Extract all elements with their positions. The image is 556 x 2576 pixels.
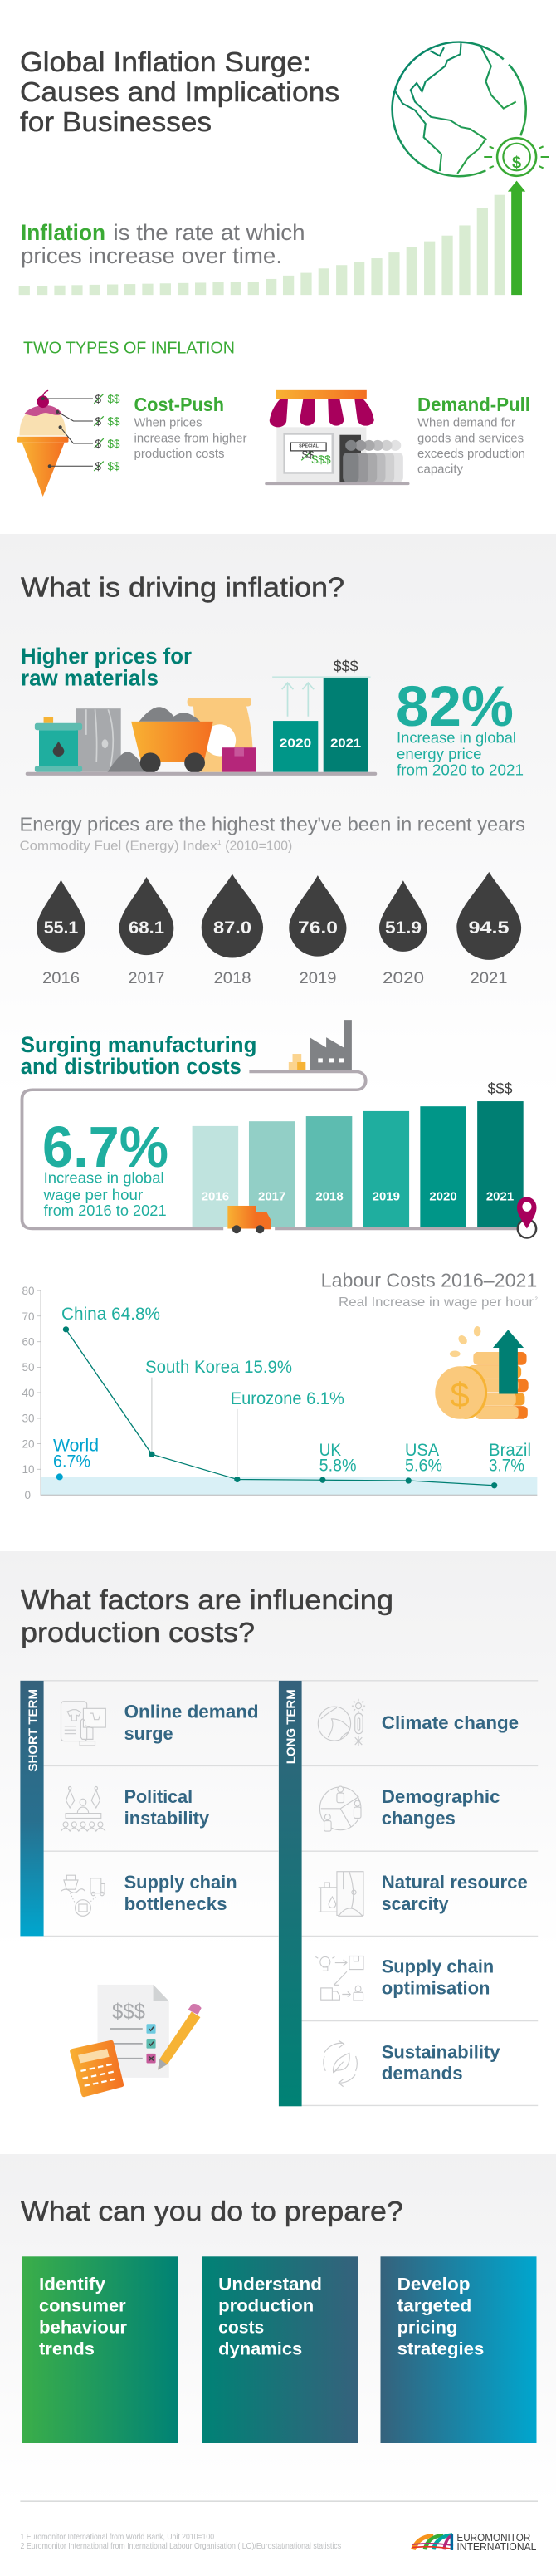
logo: Euromonitor International: EUROMONITOR (456, 2531, 530, 2544)
chart y axis labels: 70 (22, 1310, 35, 1323)
chart data labels (53, 1305, 531, 1475)
section backgrounds (0, 534, 556, 2503)
price labels: $ (95, 460, 101, 473)
chart y axis labels: 20 (22, 1438, 35, 1450)
chart data labels: UK (319, 1441, 341, 1460)
icon: supply chain bottlenecks (61, 1875, 105, 1916)
subheading: surging costs: Surging manufacturing (21, 1032, 256, 1057)
wage bar labels (202, 1080, 514, 1204)
card: production dynamics: costs (218, 2319, 264, 2338)
logo: Euromonitor International (412, 2531, 536, 2553)
drop years: 2016 (42, 970, 80, 987)
icons: factor line art (61, 1699, 365, 2087)
cost-push text: When prices (134, 415, 202, 430)
factor labels: long term: Sustainability (382, 2041, 500, 2063)
card: pricing strategies: pricing (397, 2319, 457, 2338)
card: production dynamics: production (218, 2297, 314, 2316)
subheading: higher prices (21, 644, 192, 691)
shop sign text (299, 443, 331, 466)
drop values (44, 918, 510, 938)
bar labels 2020 and 2021: $$$ (334, 658, 358, 674)
chart data labels: World (53, 1437, 99, 1455)
icon: online demand (61, 1702, 105, 1746)
card: identify trends (22, 2256, 178, 2443)
stat: 6.7 percent: from 2016 to 2021 (44, 1202, 167, 1219)
factor labels: long term: Demographic (382, 1786, 500, 1807)
illustration: budget sheet, calculator and pencil (70, 1985, 202, 2097)
demand-pull text: goods and services (417, 432, 524, 445)
price labels: $$ (108, 393, 120, 405)
cost-push text: increase from higher (134, 432, 247, 445)
cost-push text (134, 394, 247, 461)
card: identify trends: trends (39, 2340, 95, 2358)
inflation definition (21, 220, 305, 268)
card: pricing strategies: strategies (397, 2340, 484, 2358)
chart data labels: 3.7% (489, 1457, 524, 1475)
wage bar labels: 2016 (202, 1189, 229, 1204)
card: production dynamics (202, 2256, 358, 2443)
budget sheet dollars: $$$ (112, 1999, 145, 2024)
factor labels: short term: bottlenecks (124, 1893, 227, 1914)
chart y axis labels (22, 1285, 35, 1501)
drop years (42, 970, 508, 987)
logo: Euromonitor International: INTERNATIONAL (456, 2540, 536, 2553)
drop years: 2021 (470, 970, 508, 987)
card: pricing strategies: targeted (397, 2297, 471, 2316)
stat: 6.7 percent: 6.7% (42, 1114, 168, 1179)
shop sign text: $$ (302, 448, 315, 461)
inflation definition: is the rate at which (113, 220, 305, 245)
demand-pull text: capacity (417, 462, 463, 477)
subheading: surging costs: and distribution costs (21, 1054, 241, 1079)
energy prices heading: 1 (217, 839, 222, 846)
title: Causes and Implications (20, 76, 339, 107)
chart data labels: 5.8% (319, 1457, 357, 1475)
heading: what is driving inflation: What is driving inflation? (21, 571, 344, 603)
wage bar labels: 2020 (429, 1189, 457, 1204)
factor labels: short term (124, 1701, 259, 1914)
demand-pull text: When demand for (417, 415, 515, 430)
price labels (95, 393, 120, 473)
drop values: 87.0 (213, 918, 251, 938)
icon: coin dollar sign: $ (512, 154, 521, 172)
heading: production costs factors: production costs? (21, 1617, 255, 1648)
stat: 82 percent: from 2020 to 2021 (397, 762, 524, 779)
drop values: 94.5 (468, 918, 510, 938)
chart y axis labels: 60 (22, 1335, 35, 1349)
energy prices heading: (2010=100) (225, 839, 292, 854)
title (20, 47, 339, 137)
bar labels 2020 and 2021: 2021 (330, 736, 361, 751)
factor table rules (44, 1681, 538, 2105)
chart data labels: China 64.8% (61, 1305, 160, 1324)
icon: demographic changes (319, 1786, 361, 1831)
icon: ice cream cone (17, 390, 104, 497)
panel: short term bar (20, 1681, 44, 1936)
factor labels: long term: scarcity (382, 1893, 449, 1914)
factor labels: long term: demands (382, 2063, 463, 2084)
wage bar labels: 2018 (315, 1189, 344, 1204)
drop values: 76.0 (298, 918, 338, 938)
icon: supply chain optimisation (315, 1956, 363, 2001)
shop sign text: $$$ (311, 453, 331, 466)
drop values: 55.1 (44, 918, 79, 938)
panel: short term bar: SHORT TERM (27, 1689, 40, 1772)
stat: 6.7 percent: Increase in global (44, 1169, 164, 1186)
panel: long term bar: LONG TERM (285, 1689, 299, 1764)
cost-push text: Cost-Push (134, 394, 224, 415)
title: for Businesses (20, 106, 212, 137)
icon: shop with queue (265, 390, 410, 485)
card: identify trends: consumer (39, 2297, 126, 2316)
icon: climate change (318, 1699, 365, 1746)
chart y axis labels: 30 (22, 1412, 35, 1425)
chart title: labour costs: 2 (534, 1297, 538, 1302)
drop years: 2018 (214, 970, 251, 987)
drop years: 2020 (383, 970, 424, 987)
footnotes (20, 2533, 341, 2551)
icon: coin stack with arrow (435, 1326, 529, 1419)
wage bar labels: 2019 (373, 1189, 400, 1204)
illustration: raw materials (26, 677, 377, 776)
subheading: higher prices: raw materials (21, 666, 159, 691)
card: pricing strategies: Develop (397, 2275, 471, 2294)
coin dollar sign: $ (450, 1375, 470, 1414)
stat: 6.7 percent: wage per hour (43, 1187, 143, 1203)
bar labels 2020 and 2021: 2020 (280, 736, 311, 751)
price labels: $ (95, 393, 101, 405)
heading: two types of inflation: TWO TYPES OF INFLATION (23, 339, 235, 357)
chart data labels: 5.6% (405, 1457, 442, 1475)
wage bar labels: $$$ (488, 1080, 513, 1097)
card: production dynamics: Understand (218, 2275, 322, 2294)
inflation definition: prices increase over time. (21, 243, 282, 268)
card: identify trends: behaviour (39, 2319, 127, 2338)
chart title: labour costs (321, 1269, 538, 1310)
title: Global Inflation Surge: (20, 47, 311, 77)
demand-pull text: exceeds production (417, 447, 525, 461)
chart data labels: South Korea 15.9% (145, 1358, 292, 1377)
heading: production costs factors: What factors are influencing (21, 1584, 393, 1615)
card: pricing strategies (380, 2256, 536, 2443)
chart title: labour costs: Real Increase in wage per hour (339, 1295, 534, 1310)
chart data labels: Brazil (489, 1441, 531, 1460)
factor labels: long term: Supply chain (382, 1956, 494, 1976)
icon: sustainability (324, 2040, 357, 2087)
line chart: labour costs (37, 1290, 537, 1495)
icon: natural resource scarcity (319, 1872, 363, 1916)
heading: production costs factors (21, 1584, 393, 1648)
chart y axis labels: 10 (22, 1463, 35, 1476)
drop years: 2017 (128, 970, 164, 987)
bar labels 2020 and 2021 (280, 658, 361, 751)
chart y axis labels: 50 (22, 1361, 35, 1374)
footnotes: 2 Euromonitor International from International Labour Organisation (ILO)/Eurostat/national statistics (20, 2542, 341, 2551)
chart data labels: Eurozone 6.1% (231, 1389, 344, 1408)
subheading: higher prices: Higher prices for (21, 644, 192, 668)
chart y axis labels: 80 (22, 1285, 35, 1297)
wage bar labels: 2021 (486, 1189, 514, 1204)
panel: long term bar (279, 1681, 302, 2106)
chart data labels: USA (405, 1441, 439, 1460)
wage bar labels: 2017 (258, 1189, 285, 1204)
price labels: $$ (108, 460, 120, 473)
demand-pull text: Demand-Pull (417, 394, 530, 415)
factor labels: long term (382, 1712, 528, 2084)
footnotes: 1 Euromonitor International from World Bank, Unit 2010=100 (20, 2533, 214, 2542)
chart y axis labels: 40 (22, 1387, 35, 1399)
factor labels: short term: Online demand (124, 1701, 259, 1722)
heading: prepare: What can you do to prepare? (21, 2196, 403, 2226)
card: identify trends: Identify (39, 2275, 105, 2294)
icon: political instability (61, 1786, 105, 1831)
shop sign text: SPECIAL (299, 443, 319, 448)
card: production dynamics: dynamics (218, 2340, 302, 2358)
price labels: $$ (108, 438, 120, 450)
stat: 82 percent: energy price (397, 746, 481, 762)
factor labels: long term: changes (382, 1808, 456, 1829)
factor labels: short term: Supply chain (124, 1872, 237, 1893)
factor labels: long term: optimisation (382, 1978, 490, 1998)
chart y axis labels: 0 (24, 1489, 31, 1501)
demand-pull text (417, 394, 530, 477)
drop values: 51.9 (385, 918, 422, 938)
factor labels: short term: surge (124, 1723, 173, 1744)
chart: oil drops (37, 872, 521, 960)
drop years: 2019 (299, 970, 337, 987)
factor labels: long term: Climate change (382, 1712, 519, 1733)
price labels: $ (95, 415, 101, 428)
subheading: surging costs (21, 1032, 256, 1079)
icon: globe with dollar coin (393, 42, 549, 176)
stat: 82 percent: 82% (396, 674, 514, 738)
stat: 6.7 percent (42, 1114, 168, 1219)
rising bars with arrow (19, 181, 525, 295)
price labels: $ (95, 438, 101, 450)
energy prices heading (20, 814, 525, 854)
inflation definition: Inflation (21, 220, 105, 245)
stat: 82 percent: Increase in global (397, 729, 516, 746)
cost-push text: production costs (134, 447, 224, 461)
energy prices heading: Energy prices are the highest they've been in recent years (20, 814, 525, 835)
stat: 82 percent (396, 674, 524, 779)
factor labels: short term: instability (124, 1808, 210, 1829)
chart data labels: 6.7% (53, 1452, 90, 1472)
chart title: labour costs: Labour Costs 2016–2021 (321, 1269, 537, 1290)
factor labels: short term: Political (124, 1786, 193, 1807)
factor labels: long term: Natural resource (382, 1872, 528, 1893)
illustration: factory, road and bars (22, 1020, 537, 1238)
price labels: $$ (108, 415, 120, 428)
drop values: 68.1 (129, 918, 164, 938)
energy prices heading: Commodity Fuel (Energy) Index (20, 839, 217, 854)
